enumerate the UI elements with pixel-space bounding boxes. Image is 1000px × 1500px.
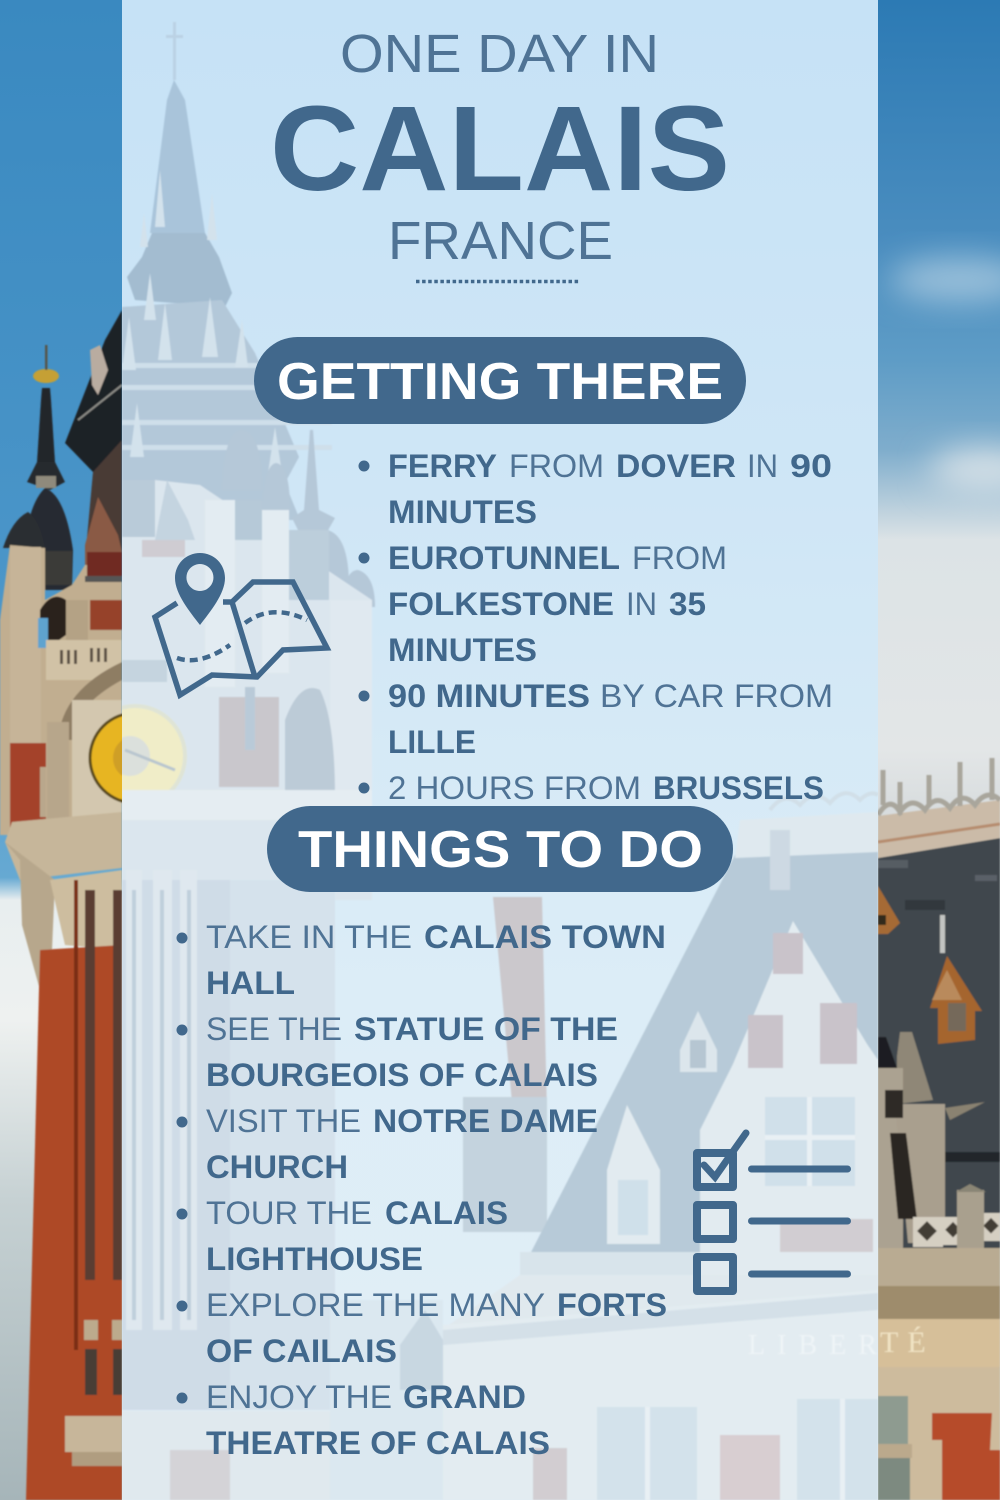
item: bourgeois statue: SEE THE: [206, 1011, 342, 1047]
item: bourgeois statue: STATUE OF THE: [354, 1011, 618, 1047]
item: ferry: MINUTES: [388, 494, 537, 530]
item: eurotunnel: FOLKESTONE: [388, 586, 614, 622]
item: forts: [206, 1287, 667, 1369]
ghost: thin right spire and domes: [222, 430, 375, 607]
item: town hall: TAKE IN THE: [206, 919, 412, 955]
ghost: balustrade, cornice and lower facade: [400, 1252, 889, 1500]
ghost: brick stair tower behind: [463, 897, 547, 1232]
title line: one day in: ONE DAY IN: [340, 24, 659, 84]
item: lighthouse: [206, 1195, 508, 1277]
item: lighthouse: LIGHTHOUSE: [206, 1241, 423, 1277]
left tower exposed: [0, 310, 180, 1500]
item: Notre Dame: VISIT THE: [206, 1103, 361, 1139]
item: lighthouse: TOUR THE: [206, 1195, 372, 1231]
ghosted building seen through the panel: [85, 22, 889, 1500]
item: forts: FORTS: [557, 1287, 667, 1323]
item: ferry: IN: [747, 448, 778, 484]
item: theatre: [206, 1379, 550, 1461]
item: theatre: GRAND: [403, 1379, 526, 1415]
item: car from Lille: BY CAR FROM: [600, 678, 833, 714]
title line: France: FRANCE: [388, 211, 613, 271]
ghost: lower belfry shaft: [122, 870, 443, 1500]
item: town hall: HALL: [206, 965, 295, 1001]
item: ferry: FERRY: [388, 448, 497, 484]
ghost: dormers: [607, 1011, 717, 1244]
icon: folded map with location pin: [155, 553, 327, 695]
translucent centre panel: [122, 0, 878, 1500]
item: car from Lille: 90 MINUTES: [388, 678, 590, 714]
list: things to do: [176, 919, 667, 1461]
item: Notre Dame: CHURCH: [206, 1149, 348, 1185]
dotted divider: [416, 280, 580, 283]
item: ferry: [388, 448, 832, 530]
title line: Calais: CALAIS: [270, 80, 730, 216]
item: town hall: [206, 919, 666, 1001]
ghost: parapet with finials: [735, 793, 878, 890]
list: getting there: [358, 448, 833, 806]
ghost: stone body of belfry: [85, 480, 372, 900]
item: Notre Dame: NOTRE DAME: [373, 1103, 598, 1139]
carved word remainder: TÉ: [880, 1326, 935, 1359]
heading: getting there: GETTING THERE: [277, 353, 723, 411]
ghost: belfry spire and upper tiers: [122, 22, 332, 520]
item: eurotunnel: MINUTES: [388, 632, 537, 668]
item: eurotunnel: FROM: [632, 540, 727, 576]
item: from Brussels: BRUSSELS: [653, 770, 824, 806]
heading: things to do: [267, 806, 733, 892]
item: eurotunnel: [388, 540, 727, 668]
heading: getting there: [254, 337, 746, 424]
ghost: carved word: LIBER: [748, 1330, 889, 1361]
icon: checklist: [697, 1133, 848, 1291]
item: theatre: ENJOY THE: [206, 1379, 392, 1415]
item: town hall: CALAIS TOWN: [424, 919, 666, 955]
item: ferry: 90: [790, 448, 832, 484]
bullets: [176, 932, 188, 1404]
right wing exposed: [878, 758, 1000, 1500]
item: from Brussels: 2 HOURS FROM: [388, 770, 641, 806]
item: eurotunnel: IN: [626, 586, 657, 622]
title block: [270, 24, 730, 282]
item: forts: OF CAILAIS: [206, 1333, 397, 1369]
ghost: slate roof: [527, 850, 878, 1260]
item: Notre Dame: [206, 1103, 598, 1185]
bullets: [358, 460, 370, 794]
item: bourgeois statue: [206, 1011, 618, 1093]
item: eurotunnel: EUROTUNNEL: [388, 540, 620, 576]
item: bourgeois statue: BOURGEOIS OF CALAIS: [206, 1057, 598, 1093]
item: lighthouse: CALAIS: [385, 1195, 508, 1231]
item: eurotunnel: 35: [669, 586, 706, 622]
item: ferry: FROM: [509, 448, 604, 484]
ghost: central gable: [700, 921, 878, 1280]
heading: things to do: THINGS TO DO: [298, 821, 703, 879]
item: forts: EXPLORE THE MANY: [206, 1287, 545, 1323]
ghost: clock face: [85, 706, 185, 806]
item: car from Lille: LILLE: [388, 724, 476, 760]
item: car from Lille: [388, 678, 833, 760]
item: ferry: DOVER: [616, 448, 736, 484]
item: theatre: THEATRE OF CALAIS: [206, 1425, 550, 1461]
item: from Brussels: [388, 770, 824, 806]
